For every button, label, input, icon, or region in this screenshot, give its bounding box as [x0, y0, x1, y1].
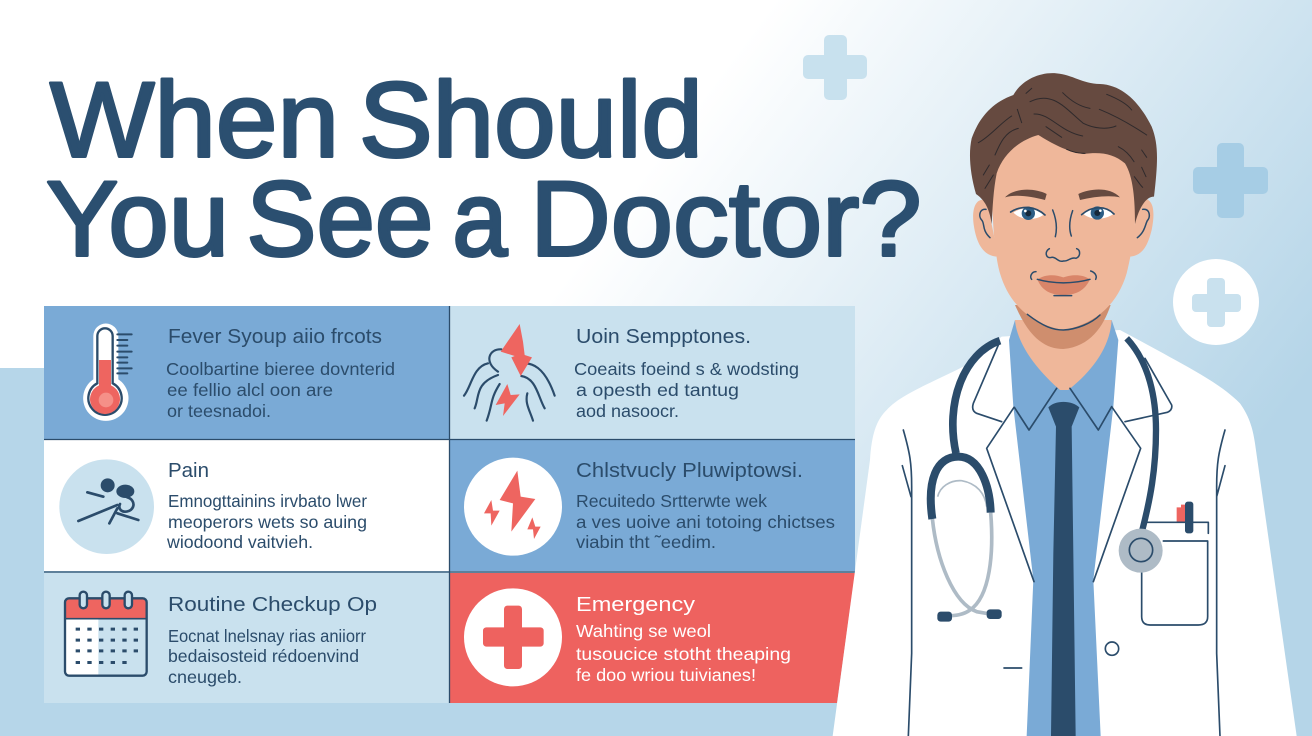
heading: Routine Checkup Op — [168, 593, 377, 616]
nose — [1046, 210, 1080, 261]
panel dividers — [44, 306, 855, 703]
panel: chest symptoms — [450, 440, 855, 571]
body text: Recuitedo Srtterwte wek — [576, 491, 767, 511]
title: See — [246, 159, 433, 279]
ear lines — [980, 209, 1149, 238]
head: hair and face — [970, 73, 1157, 349]
panel: routine checkup — [44, 573, 449, 703]
icon: red cross in circle — [464, 588, 562, 686]
decorative cross: right — [1193, 143, 1268, 218]
panel: fever — [44, 306, 449, 439]
heading: Chlstvucly Pluwiptowsi. — [576, 459, 803, 482]
shirt — [1009, 320, 1118, 736]
body text: tusoucice stotht theaping — [576, 644, 791, 664]
title: Doctor? — [530, 159, 922, 279]
body text — [166, 491, 367, 552]
body text: or teesnadoi. — [167, 401, 271, 421]
body text: ee fellio alcl oon are — [167, 380, 333, 400]
neck shadow — [1015, 305, 1111, 349]
icon: calendar — [65, 592, 147, 676]
face — [992, 110, 1137, 330]
body text: fe doo wriou tuivianes! — [576, 665, 756, 685]
panel: joint symptoms — [450, 306, 855, 439]
coat seams — [902, 430, 1225, 736]
title: When — [50, 59, 339, 179]
body text: aod nasoocr. — [576, 401, 679, 421]
body text — [576, 621, 791, 685]
body text: Eocnat lnelsnay rias aniiorr — [168, 626, 366, 646]
body text: wiodoond vaitvieh. — [166, 532, 313, 552]
heading: Uoin Sempptones. — [576, 325, 751, 348]
collar and lapel lines — [973, 345, 1172, 582]
heading: Pain — [168, 459, 209, 482]
body: coat, shirt, tie, stethoscope — [833, 320, 1297, 736]
icon: lightning in circle — [464, 458, 562, 556]
ears — [973, 198, 1153, 257]
panel: emergency — [450, 573, 855, 703]
body text — [166, 359, 395, 421]
eyebrows — [1005, 190, 1120, 200]
body text: a opesth ed tantug — [576, 380, 739, 400]
jaw line — [1027, 314, 1100, 330]
body text: Coeaits foeind s & wodsting — [574, 359, 799, 379]
icon: pain figure — [59, 459, 154, 554]
title: Should — [359, 59, 703, 179]
hair — [970, 73, 1157, 224]
icon: thermometer — [83, 323, 132, 421]
body text: Coolbartine bieree dovnterid — [166, 359, 395, 379]
stethoscope — [931, 338, 1163, 622]
title: a — [452, 159, 508, 279]
coat button — [1105, 642, 1119, 655]
body text: bedaisosteid rédoenvind — [168, 646, 359, 666]
body text: viabin tht ˜eedim. — [576, 532, 716, 552]
panel: pain — [44, 440, 449, 571]
title — [46, 59, 922, 279]
body text — [574, 359, 799, 421]
heading: Fever Syoup aiio frcots — [168, 325, 382, 348]
body text: cneugeb. — [168, 667, 242, 687]
heading: Emergency — [576, 593, 696, 616]
coat — [833, 330, 1297, 736]
body text — [168, 626, 366, 687]
eyes — [1011, 206, 1114, 220]
icon: nerves with lightning — [464, 324, 555, 421]
body text — [576, 491, 835, 552]
body text: a ves uoive ani totoing chictses — [576, 512, 835, 532]
neck — [1015, 320, 1112, 390]
title: You — [46, 159, 229, 279]
tie — [1048, 402, 1079, 736]
mouth — [1031, 271, 1096, 296]
hair strands — [978, 88, 1147, 188]
doctor illustration — [833, 73, 1297, 736]
body text: Wahting se weol — [576, 621, 711, 641]
pocket with pen — [1142, 502, 1208, 625]
decorative cross in white circle — [1173, 259, 1259, 345]
decorative cross: top — [803, 35, 867, 100]
body text: meoperors wets so auing — [168, 512, 367, 532]
body text: Emnogttainins irvbato lwer — [168, 491, 367, 511]
